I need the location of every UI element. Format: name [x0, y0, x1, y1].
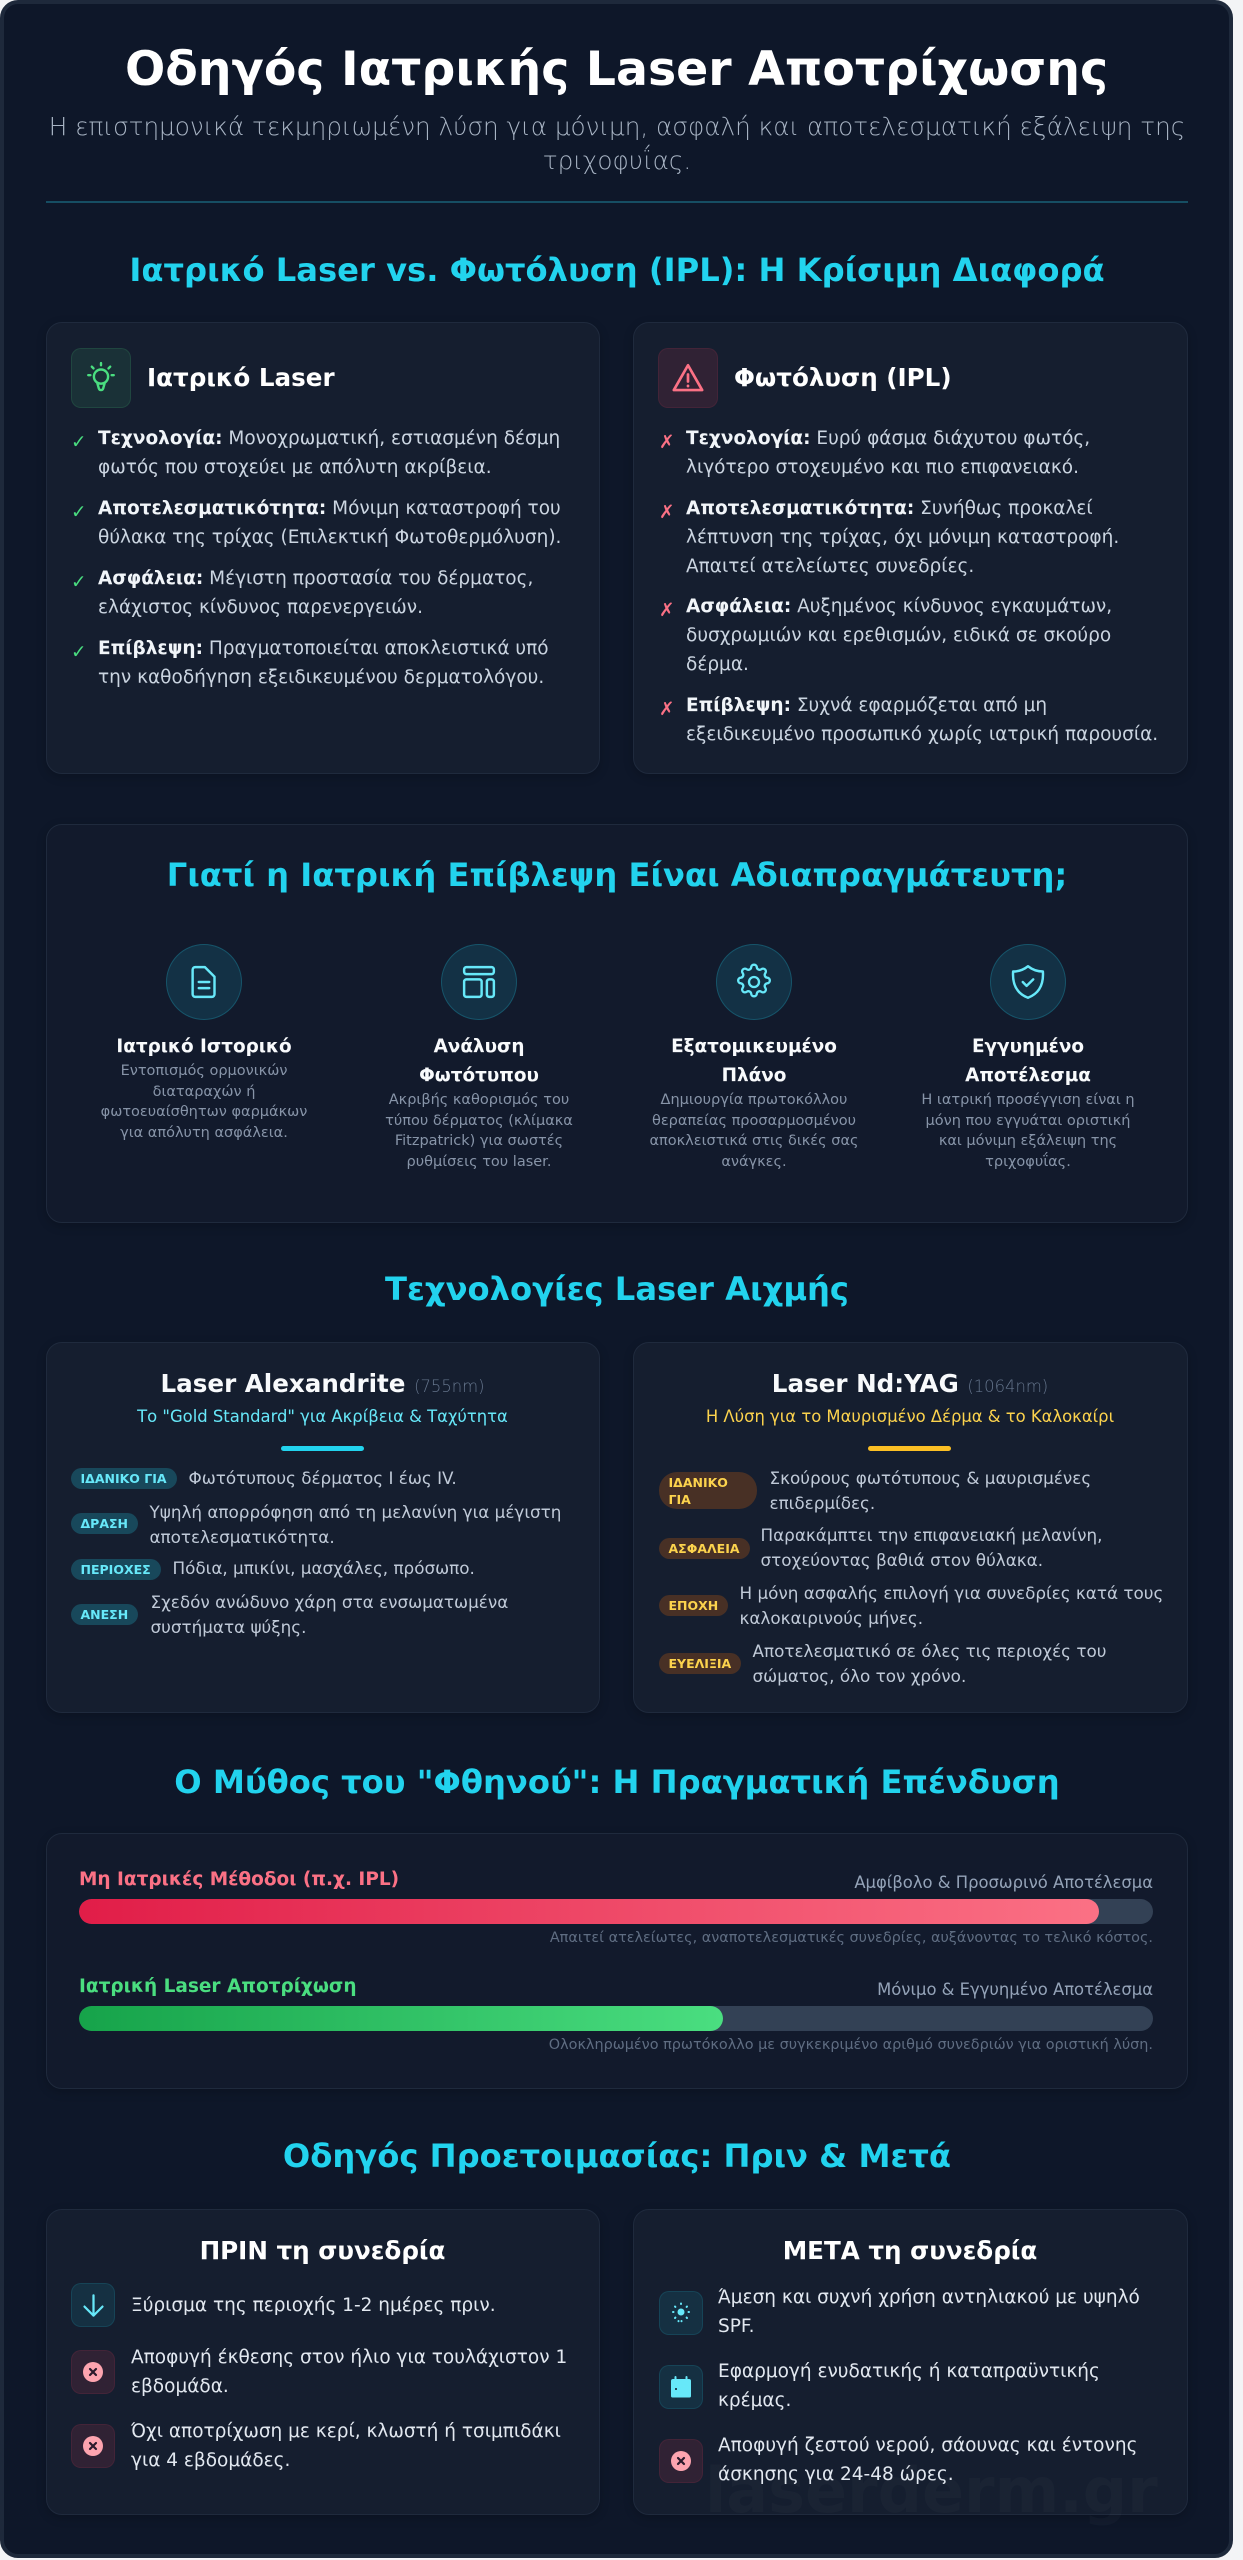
subtitle	[49, 112, 1185, 175]
feature: phototype analysis: Ακριβής καθορισμός του	[389, 1092, 569, 1108]
feature: personalised plan: θεραπείας προσαρμοσμένου	[652, 1113, 856, 1129]
panel: Nd:YAG: Παρακάμπτει την επιφανειακή μελανίνη,	[760, 1525, 1102, 1545]
icon: document	[166, 944, 242, 1020]
feature: phototype analysis	[385, 1036, 573, 1170]
checklist: medical laser: ✓	[71, 642, 87, 662]
subtitle: Η επιστημονικά τεκμηριωμένη λύση για μόνιμη, ασφαλή και αποτελεσματική εξάλειψη της	[49, 112, 1185, 141]
checklist: medical laser: Επίβλεψη: Πραγματοποιείται αποκλειστικά υπό	[98, 638, 549, 658]
checklist: medical laser: φωτός που στοχεύει με απόλυτη ακρίβεια.	[98, 456, 492, 478]
feature: medical history: διαταραχών ή	[153, 1084, 255, 1100]
feature: medical history: για απόλυτη ασφάλεια.	[120, 1125, 288, 1141]
row: comfort: συστήματα ψύξης.	[150, 1617, 306, 1637]
row: action	[71, 1502, 561, 1547]
panel: Alexandrite	[46, 1342, 600, 1713]
tip: sunscreen: SPF.	[718, 2316, 754, 2337]
row: areas: ΠΕΡΙΟΧΕΣ	[80, 1562, 151, 1577]
row: comfort: ΑΝΕΣΗ	[80, 1607, 128, 1622]
tip: moisturiser	[659, 2361, 1100, 2411]
bar: medical 60%	[79, 2006, 1153, 2031]
row: action: αποτελεσματικότητα.	[150, 1527, 335, 1547]
feature: personalised plan	[649, 1036, 859, 1170]
tip: no waxing	[71, 2421, 561, 2471]
tip: sunscreen	[659, 2287, 1140, 2337]
panel: IPL	[633, 322, 1188, 774]
checklist: IPL: Αποτελεσματικότητα: Συνήθως προκαλεί	[686, 498, 1093, 518]
Nd:YAG accent bar	[868, 1446, 951, 1451]
feature: medical history: Ιατρικό Ιστορικό	[116, 1036, 292, 1057]
feature: phototype analysis: τύπου δέρματος (κλίμακα	[385, 1113, 573, 1129]
feature: guaranteed result: τριχοφυΐας.	[985, 1154, 1071, 1170]
tip: shave	[71, 2283, 496, 2327]
tip: sunscreen: Άμεση και συχνή χρήση αντηλιακού με υψηλό	[718, 2287, 1140, 2308]
panel: medical supervision	[46, 824, 1188, 1223]
panel heading: medical laser: Ιατρικό Laser	[147, 363, 335, 392]
row: action: ΔΡΑΣΗ	[80, 1516, 128, 1531]
row: flexibility	[659, 1641, 1106, 1686]
checklist: medical laser: ✓	[71, 502, 87, 522]
tip: avoid heat: Αποφυγή ζεστού νερού, σάουνας και έντονης	[718, 2435, 1137, 2456]
row: comfort	[71, 1592, 508, 1637]
panel: after session	[633, 2209, 1188, 2515]
checklist: medical laser: Αποτελεσματικότητα: Μόνιμη καταστροφή του	[98, 498, 561, 518]
feature: medical history	[101, 1036, 307, 1141]
panel: Nd:YAG: Αποτελεσματικό σε όλες τις περιοχές του	[752, 1641, 1106, 1661]
bar note: medical: Ολοκληρωμένο πρωτόκολλο με συγκεκριμένο αριθμό συνεδριών για οριστική λύση.	[549, 2037, 1153, 2053]
feature: personalised plan: Πλάνο	[722, 1065, 786, 1086]
bar label: medical: Ιατρική Laser Αποτρίχωση	[79, 1976, 357, 1997]
tip: avoid sun: Αποφυγή έκθεσης στον ήλιο για τουλάχιστον 1	[131, 2347, 567, 2368]
row: ideal for: επιδερμίδες.	[770, 1493, 875, 1513]
before heading: ΠΡΙΝ τη συνεδρία	[200, 2236, 445, 2265]
panel: before session	[46, 2209, 600, 2515]
row: season	[659, 1583, 1163, 1628]
feature: personalised plan: Δημιουργία πρωτοκόλλου	[661, 1092, 847, 1108]
checklist: IPL: Επίβλεψη: Συχνά εφαρμόζεται από μη	[686, 694, 1047, 716]
icon: gear	[716, 944, 792, 1020]
tip: no waxing: για 4 εβδομάδες.	[131, 2450, 290, 2471]
heading: preparation guide: Οδηγός Προετοιμασίας: Πριν & Μετά	[283, 2137, 951, 2175]
row: season: ΕΠΟΧΗ	[668, 1598, 718, 1613]
checklist: IPL: Απαιτεί ατελείωτες συνεδρίες.	[686, 556, 974, 576]
checklist: IPL: ✗	[659, 432, 675, 452]
Alexandrite title: Laser Alexandrite (755nm)	[160, 1369, 484, 1398]
icon: x circle	[659, 2439, 703, 2483]
feature: phototype analysis: Φωτότυπου	[419, 1065, 539, 1086]
checklist: medical laser: ✓	[71, 432, 87, 452]
panel: Nd:YAG	[633, 1342, 1188, 1713]
checklist: IPL	[659, 428, 1158, 744]
heading: myth of cheap: Ο Μύθος του "Φθηνού": Η Πραγματική Επένδυση	[174, 1763, 1060, 1801]
checklist: IPL: ✗	[659, 600, 675, 620]
icon: calendar	[659, 2365, 703, 2409]
Alexandrite accent bar	[281, 1446, 364, 1451]
bar label: non-medical: Μη Ιατρικές Μέθοδοι (π.χ. IPL)	[79, 1869, 399, 1890]
bar result: non-medical: Αμφίβολο & Προσωρινό Αποτέλεσμα	[854, 1873, 1153, 1892]
bar result: medical: Μόνιμο & Εγγυημένο Αποτέλεσμα	[877, 1980, 1153, 1999]
feature: guaranteed result: μόνη που εγγυάται οριστική	[926, 1113, 1130, 1129]
checklist: IPL: εξειδικευμένο προσωπικό χωρίς ιατρική παρουσία.	[686, 724, 1158, 744]
tip: avoid heat	[659, 2435, 1137, 2485]
icon: shield	[990, 944, 1066, 1020]
tip: moisturiser: κρέμας.	[718, 2390, 791, 2411]
row: ideal for: ΙΔΑΝΙΚΟ ΓΙΑ	[668, 1474, 728, 1506]
icon: x circle	[71, 2350, 115, 2394]
panel: cost comparison	[46, 1833, 1188, 2089]
icon: sun	[659, 2291, 703, 2335]
row: season: καλοκαιρινούς μήνες.	[740, 1608, 923, 1628]
checklist: medical laser: Ασφάλεια: Μέγιστη προστασία του δέρματος,	[98, 568, 533, 588]
checklist: medical laser: την καθοδήγηση εξειδικευμένου δερματολόγου.	[98, 666, 544, 688]
tip: avoid heat: άσκησης για 24-48 ώρες.	[718, 2464, 954, 2485]
checklist: IPL: λιγότερο στοχευμένο και πιο επιφανειακό.	[686, 456, 1079, 478]
tip: avoid sun	[71, 2347, 567, 2397]
checklist: IPL: ✗	[659, 698, 675, 720]
feature: personalised plan: ανάγκες.	[721, 1154, 787, 1170]
feature: medical history: Εντοπισμός ορμονικών	[121, 1063, 287, 1079]
watermark: laserderm.gr	[705, 2454, 1158, 2527]
bar note: non-medical: Απαιτεί ατελείωτες, αναποτελεσματικές συνεδρίες, αυξάνοντας το τελικό κόστος.	[550, 1930, 1153, 1946]
feature: phototype analysis: Fitzpatrick) για σωστές	[395, 1133, 563, 1149]
row: ideal for	[71, 1468, 457, 1489]
row: ideal for: ΙΔΑΝΙΚΟ ΓΙΑ	[80, 1471, 167, 1486]
feature: guaranteed result: Εγγυημένο	[972, 1036, 1084, 1057]
checklist: medical laser: ελάχιστος κίνδυνος παρενεργειών.	[98, 596, 423, 618]
feature: guaranteed result: Αποτέλεσμα	[965, 1065, 1091, 1086]
checklist: IPL: Ασφάλεια: Αυξημένος κίνδυνος εγκαυμάτων,	[686, 596, 1112, 616]
feature: phototype analysis: Ανάλυση	[434, 1036, 524, 1057]
row: safety: ΑΣΦΑΛΕΙΑ	[668, 1541, 740, 1556]
row: flexibility: ΕΥΕΛΙΞΙΑ	[668, 1656, 731, 1671]
tip: avoid sun: εβδομάδα.	[131, 2376, 229, 2397]
row: safety: στοχεύοντας βαθιά στον θύλακα.	[760, 1550, 1043, 1570]
checklist: IPL: ✗	[659, 502, 675, 522]
icon: arrow down	[71, 2283, 115, 2327]
subtitle: τριχοφυΐας.	[543, 146, 691, 175]
icon: x circle	[71, 2424, 115, 2468]
heading: laser technologies: Τεχνολογίες Laser Αιχμής	[385, 1270, 849, 1308]
checklist: medical laser: Τεχνολογία: Μονοχρωματική, εστιασμένη δέσμη	[98, 428, 560, 448]
checklist: medical laser: θύλακα της τρίχας (Επιλεκτική Φωτοθερμόλυση).	[98, 526, 561, 548]
Alexandrite subtitle: Το "Gold Standard" για Ακρίβεια & Ταχύτητα	[137, 1407, 508, 1426]
row: ideal for: Φωτότυπους δέρματος Ι έως ΙV.	[188, 1468, 457, 1488]
Nd:YAG title: Laser Nd:YAG (1064nm)	[772, 1369, 1048, 1398]
checklist: IPL: λέπτυνση της τρίχας, όχι μόνιμη καταστροφή.	[686, 526, 1119, 548]
tip: shave: Ξύρισμα της περιοχής 1-2 ημέρες πριν.	[131, 2295, 496, 2316]
feature: medical history: φωτοευαίσθητων φαρμάκων	[101, 1104, 307, 1120]
header rule	[46, 201, 1188, 203]
panel: Nd:YAG: Η μόνη ασφαλής επιλογή για συνεδρίες κατά τους	[740, 1583, 1163, 1603]
checklist: medical laser: ✓	[71, 572, 87, 592]
row: areas	[71, 1558, 475, 1580]
panel: medical laser	[46, 322, 600, 774]
checklist: medical laser	[71, 428, 561, 688]
bar: non-medical 95%	[79, 1899, 1153, 1924]
feature: guaranteed result: Η ιατρική προσέγγιση είναι η	[921, 1092, 1135, 1108]
panel heading: IPL: Φωτόλυση (IPL)	[734, 363, 952, 392]
tip: no waxing: Όχι αποτρίχωση με κερί, κλωστή ή τσιμπιδάκι	[131, 2421, 561, 2442]
checklist: IPL: δυσχρωμιών και ερεθισμών, ειδικά σε σκούρο	[686, 624, 1111, 646]
feature: phototype analysis: ρυθμίσεις του laser.	[407, 1154, 551, 1170]
after heading: ΜΕΤΑ τη συνεδρία	[783, 2236, 1037, 2265]
title: Οδηγός Ιατρικής Laser Αποτρίχωσης	[125, 42, 1108, 97]
icon: light bulb	[71, 348, 131, 408]
feature: personalised plan: Εξατομικευμένο	[671, 1036, 837, 1057]
row: safety	[659, 1525, 1102, 1570]
feature: guaranteed result: και μόνιμη εξάλειψη της	[939, 1133, 1117, 1149]
feature: personalised plan: αποκλειστικά στις δικές σας	[649, 1133, 859, 1149]
panel: Alexandrite: Υψηλή απορρόφηση από τη μελανίνη για μέγιστη	[150, 1502, 561, 1522]
row: areas: Πόδια, μπικίνι, μασχάλες, πρόσωπο.	[172, 1558, 475, 1578]
checklist: IPL: δέρμα.	[686, 654, 749, 674]
checklist: IPL: Τεχνολογία: Ευρύ φάσμα διάχυτου φωτός,	[686, 428, 1090, 448]
tip: moisturiser: Εφαρμογή ενυδατικής ή καταπραϋντικής	[718, 2361, 1100, 2382]
icon: layout	[441, 944, 517, 1020]
feature: guaranteed result	[921, 1036, 1135, 1170]
row: ideal for	[659, 1468, 1091, 1513]
icon: warning triangle	[658, 348, 718, 408]
heading: medical supervision: Γιατί η Ιατρική Επίβλεψη Είναι Αδιαπραγμάτευτη;	[167, 856, 1067, 894]
row: ideal for: Σκούρους φωτότυπους & μαυρισμένες	[770, 1468, 1091, 1488]
panel: Alexandrite: Σχεδόν ανώδυνο χάρη στα ενσωματωμένα	[150, 1592, 508, 1612]
Nd:YAG subtitle: Η Λύση για το Μαυρισμένο Δέρμα & το Καλοκαίρι	[706, 1407, 1114, 1426]
row: flexibility: σώματος, όλο τον χρόνο.	[752, 1666, 966, 1686]
heading: laser vs IPL: Ιατρικό Laser vs. Φωτόλυση (IPL): Η Κρίσιμη Διαφορά	[129, 251, 1105, 289]
